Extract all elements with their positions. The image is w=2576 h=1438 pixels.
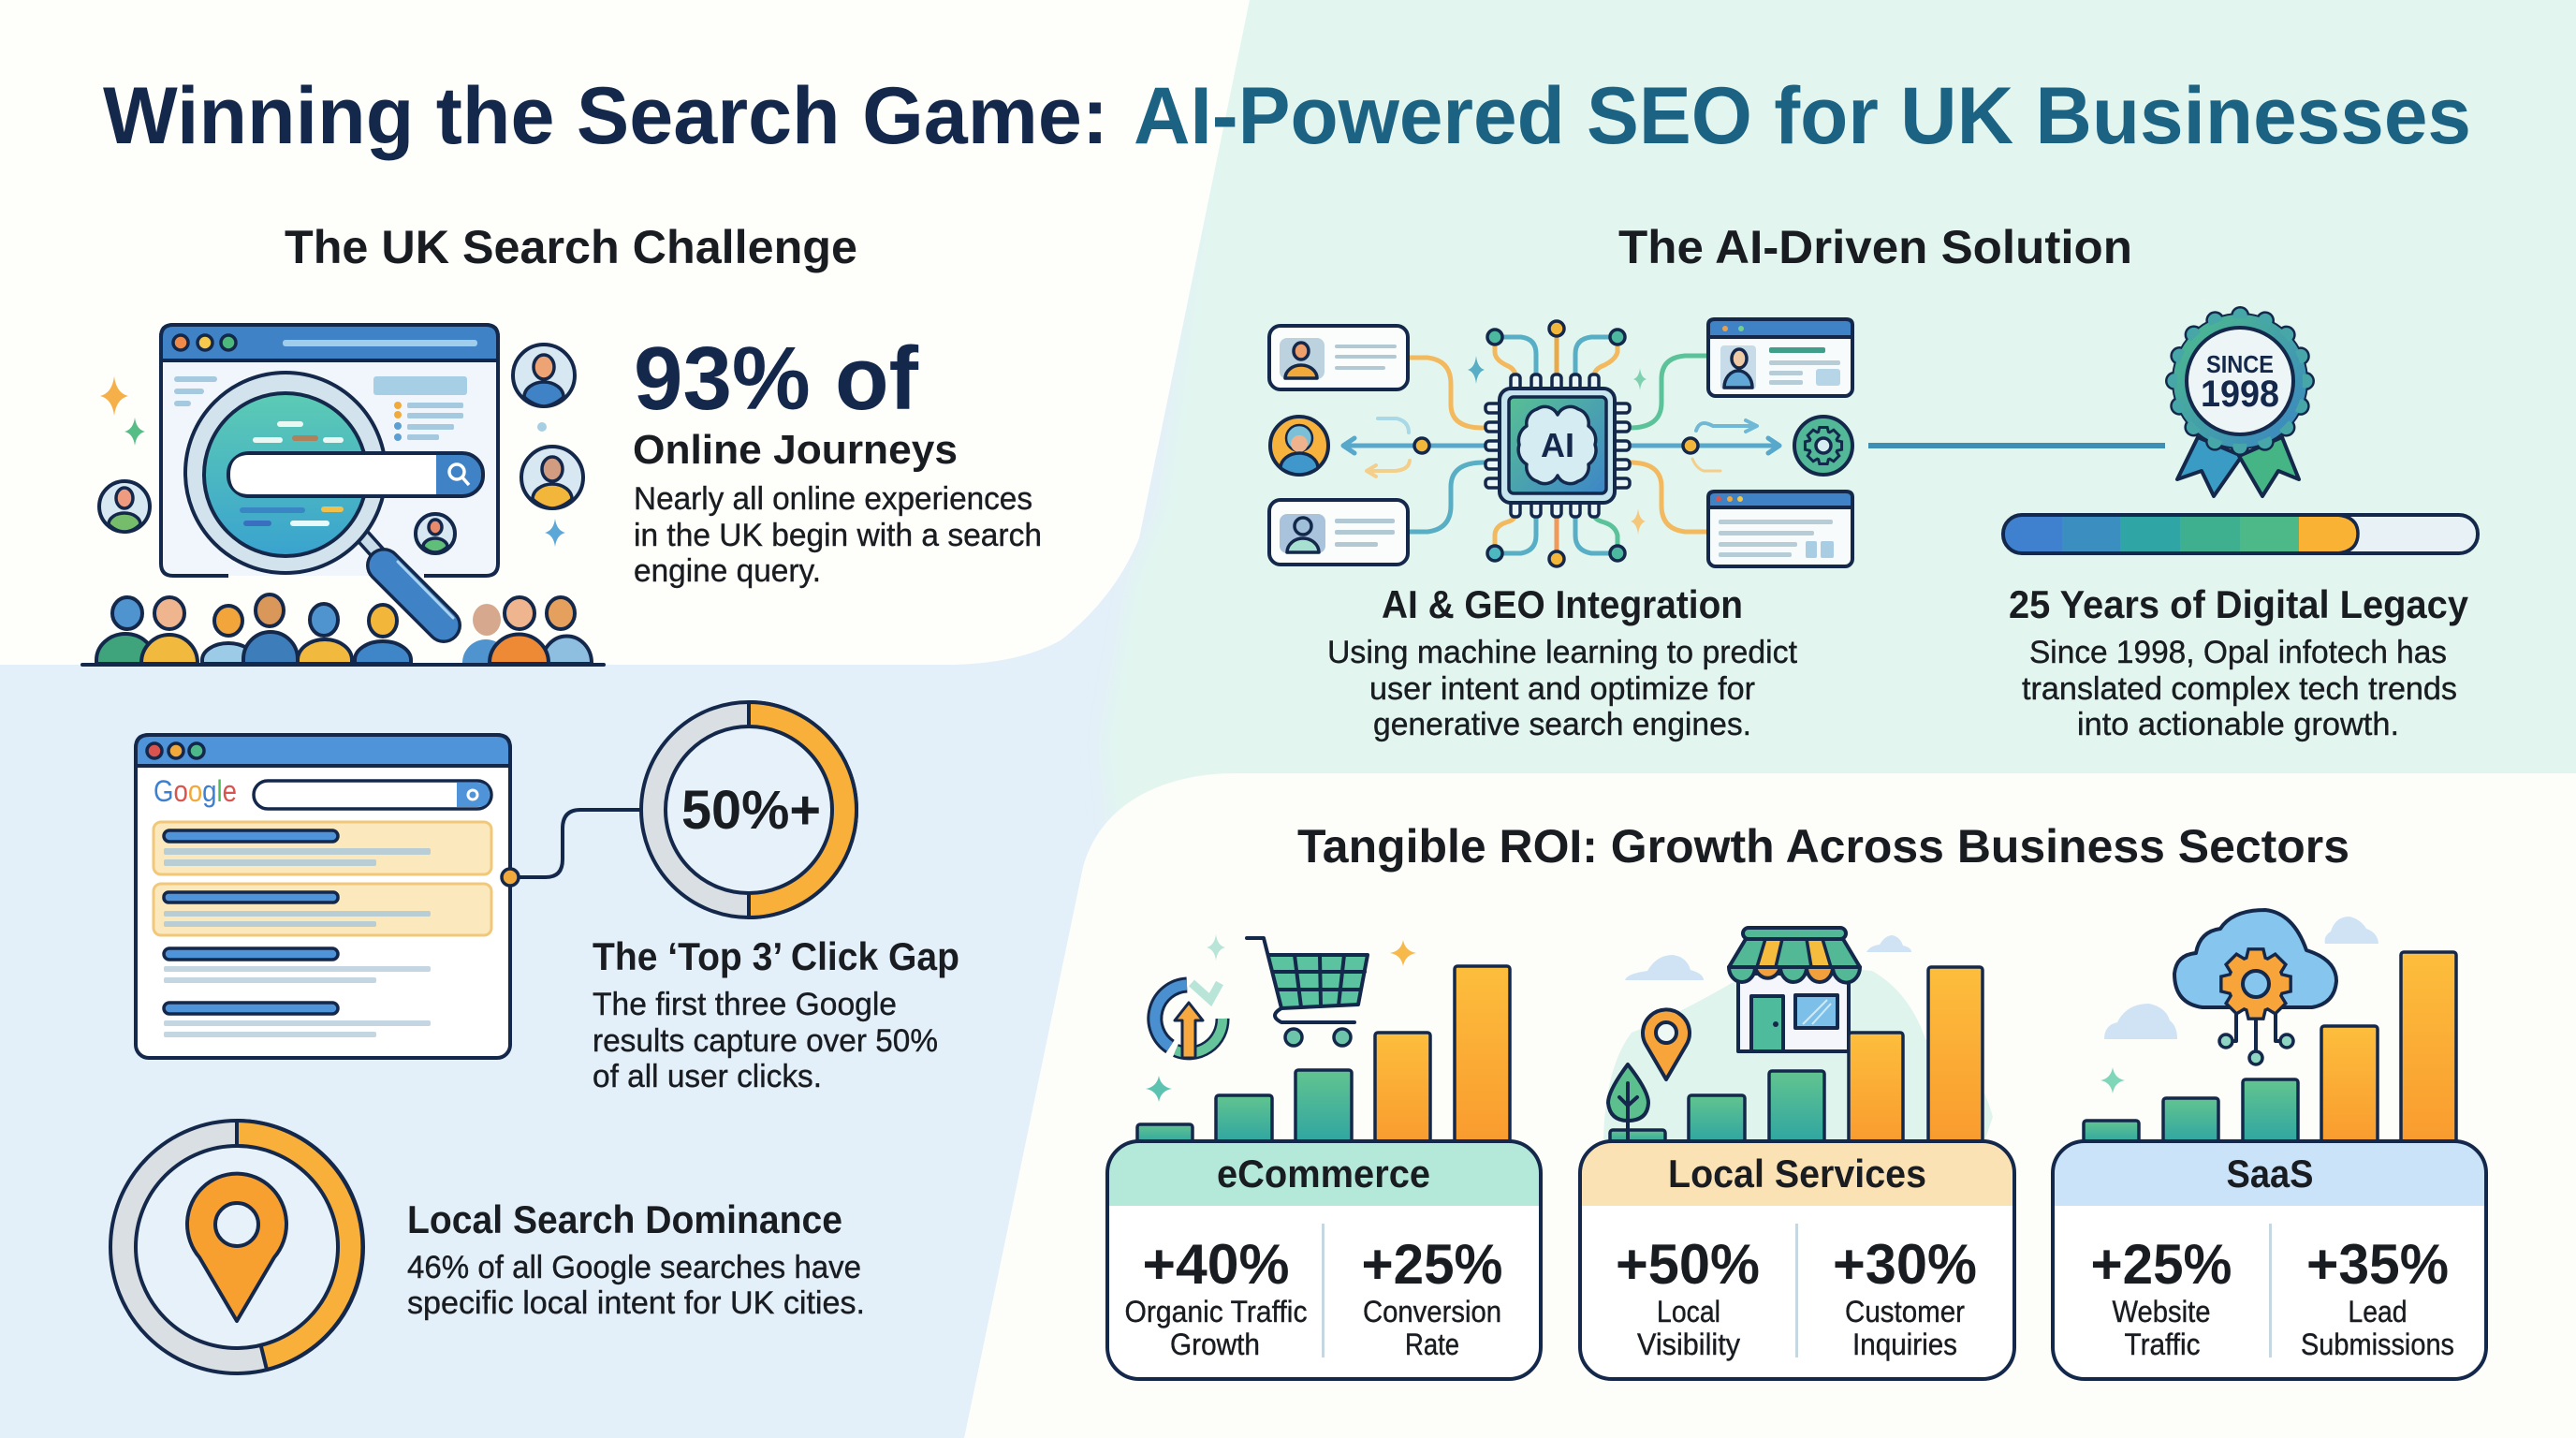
card: Lead [2348,1295,2408,1328]
card: Visibility [1637,1328,1740,1361]
card: browser bottom right [1708,492,1852,566]
icon: AI chip [1486,374,1630,517]
card: user profile 2 [1270,417,1328,475]
card: +30% [1833,1233,1977,1296]
text: Top 3 Click Gap: The first three Google [593,987,897,1022]
icon: since 1998 badge: SINCE [2206,350,2274,378]
card: +35% [2306,1233,2449,1296]
card: user profile 1 [1269,326,1408,389]
illustration: Google results browser [136,735,510,1058]
icon: since 1998 badge: 1998 [2201,374,2279,415]
title: Winning the Search Game: [103,71,1108,161]
icon: sparkles [1146,934,1416,1102]
illustration: Google results browser: Google [154,774,237,808]
bar chart [2084,952,2456,1143]
text: 25 Years of Digital Legacy: Since 1998, Opal infotech has [2029,635,2447,670]
text: AI & GEO Integration: user intent and optimize for [1369,671,1755,707]
panel: The AI-Driven Solution [1269,221,2478,742]
icon: cloud with gear [2174,910,2336,1064]
icon: sparkles [1468,356,1647,535]
bar chart [1610,967,1983,1143]
icon: AI chip: AI [1541,426,1574,464]
icon: clouds [1625,935,1911,980]
donut chart: location pin [110,1121,363,1373]
sector: Local Services [1580,928,2014,1379]
card: Local [1657,1295,1720,1328]
text: Local Search Dominance: Local Search Dominance [407,1197,842,1241]
text: 25 Years of Digital Legacy: into actionable growth. [2077,707,2399,742]
icon: small clouds [2104,917,2378,1039]
big stat: 93% of Online Journeys: Nearly all online experiences [634,481,1032,517]
text: Top 3 Click Gap: results capture over 50% [593,1023,938,1059]
text: Local Search Dominance: specific local intent for UK cities. [407,1285,865,1321]
card: +50% [1616,1233,1760,1296]
text: Top 3 Click Gap: The ‘Top 3’ Click Gap [593,934,959,978]
bar chart [1137,966,1510,1143]
card [2053,1141,2486,1379]
card: eCommerce [1217,1152,1430,1196]
background: white ROI panel [964,773,2576,1438]
card: Growth [1170,1328,1260,1361]
text: Local Search Dominance: 46% of all Google searches have [407,1250,861,1285]
icon: shopping cart [1247,938,1368,1046]
arrows: data flow [1343,418,1779,477]
card: Customer [1845,1295,1965,1328]
text: 25 Years of Digital Legacy: translated complex tech trends [2022,671,2457,707]
card: +25% [1361,1233,1503,1296]
card: Local Services [1668,1152,1926,1196]
card [1107,1141,1541,1379]
panel: local search [110,1121,865,1373]
text: 25 Years of Digital Legacy [2009,582,2469,742]
illustration: crowd of users [82,594,604,665]
text: AI & GEO Integration: AI & GEO Integration [1382,582,1743,626]
card: user profile 3 [1269,500,1408,565]
background: green panel [1102,0,2576,861]
icon: since 1998 badge [2173,314,2307,496]
heading: The UK Search Challenge [285,221,857,273]
text: Top 3 Click Gap: of all user clicks. [593,1059,822,1094]
icon: tree [1608,1064,1648,1141]
card [1580,1141,2014,1379]
title [103,71,2471,161]
icon: user avatars [99,345,583,553]
card: +40% [1142,1233,1290,1296]
title: AI-Powered SEO for UK Businesses [1134,71,2471,161]
card: Inquiries [1852,1328,1957,1361]
card: Website [2112,1295,2211,1328]
card: Conversion [1363,1295,1501,1328]
background: cream panel [0,0,1250,665]
card: Organic Traffic [1125,1295,1307,1328]
card: +25% [2091,1233,2232,1296]
text: Top 3 Click Gap [593,934,959,1094]
card: Traffic [2125,1328,2200,1361]
heading: The AI-Driven Solution [1618,221,2132,273]
card: browser top right [1708,319,1852,396]
icon: sparkles [100,376,565,547]
big stat: 93% of Online Journeys: 93% of [634,329,919,429]
background hill [1603,969,1993,1141]
card: Rate [1405,1328,1459,1361]
panel: The UK Search Challenge [82,221,1042,665]
icon: circuit nodes [1487,321,1625,566]
icon: growth cycle arrow [1155,983,1222,1058]
illustration: browser with magnifier [161,325,498,625]
text: AI & GEO Integration [1327,582,1798,742]
text: Local Search Dominance [407,1197,865,1321]
text: AI & GEO Integration: Using machine learning to predict [1327,635,1798,670]
donut chart: 50%+ [641,702,856,917]
icon: sparkle [2100,1067,2125,1093]
big stat: 93% of Online Journeys: Online Journeys [633,427,958,473]
card: SaaS [2226,1152,2314,1196]
panel: Tangible ROI [1107,820,2486,1379]
timeline connector [1868,443,2165,448]
big stat: 93% of Online Journeys: in the UK begin with a search [634,518,1042,553]
sector: SaaS [2053,910,2486,1379]
icon: gear [1794,417,1852,475]
panel: click gap [136,702,959,1094]
progress bar: 25 years [2003,515,2478,553]
icon: map pin [1643,1009,1690,1079]
heading: Tangible ROI: Growth Across Business Sectors [1297,820,2349,873]
sector: eCommerce [1107,934,1541,1379]
big stat: 93% of Online Journeys [633,329,1042,589]
icon: store [1729,928,1860,1051]
big stat: 93% of Online Journeys: engine query. [634,553,821,589]
connector [502,810,640,886]
text: AI & GEO Integration: generative search engines. [1373,707,1751,742]
text: 25 Years of Digital Legacy: 25 Years of Digital Legacy [2009,582,2469,626]
donut chart: 50%+: 50%+ [681,780,821,841]
diagram: circuit connections [1408,336,1708,553]
card: Submissions [2301,1328,2454,1361]
